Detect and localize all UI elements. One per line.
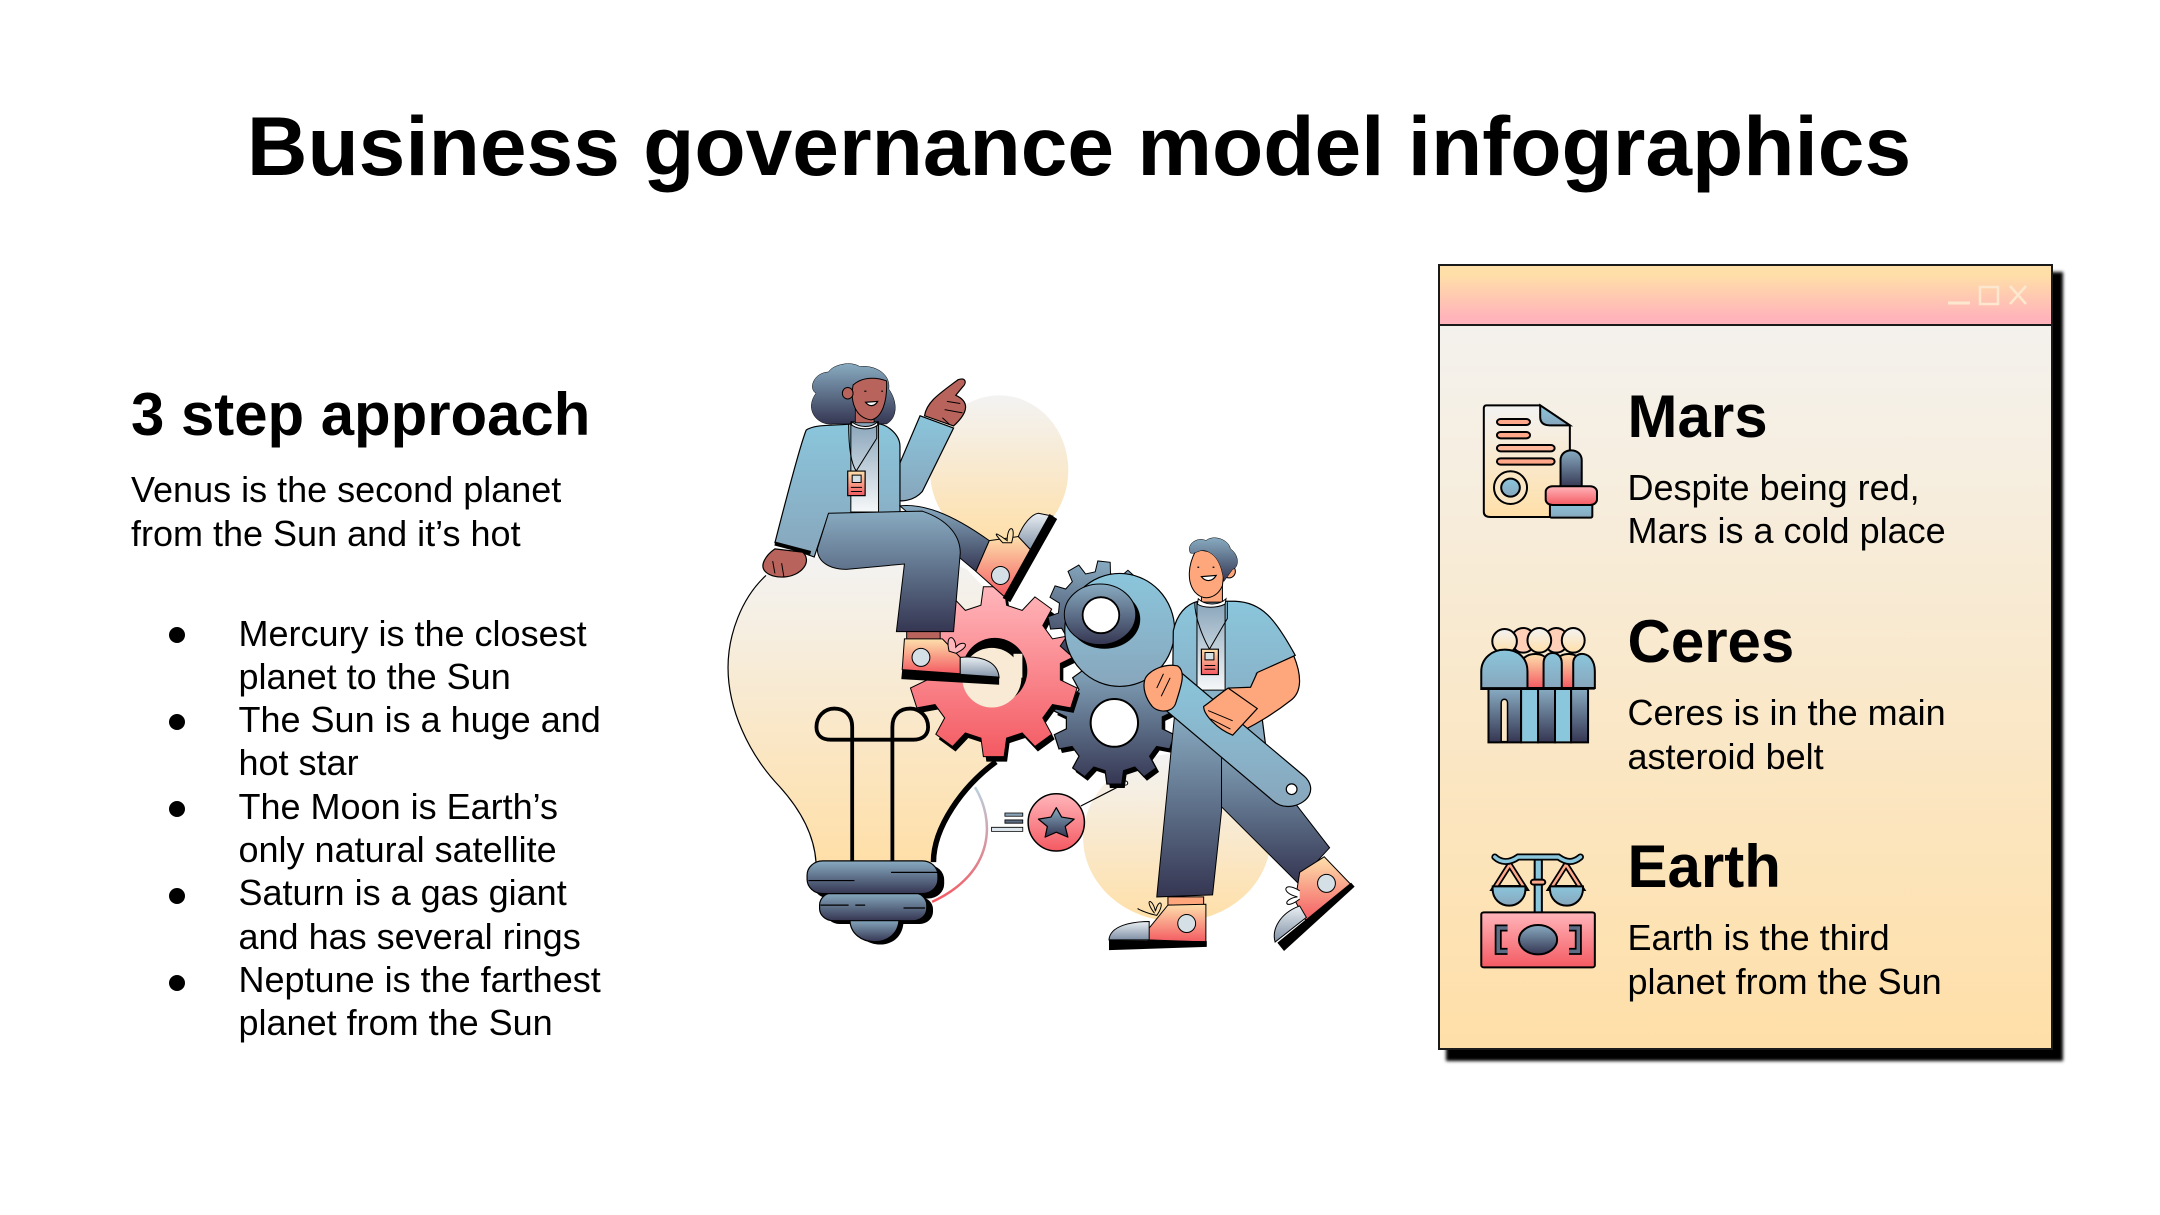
- dark gear upper and wrench head: [1044, 556, 1175, 686]
- Mars text: Despite being red,: [1628, 467, 1920, 508]
- Mars text: [1628, 467, 1946, 551]
- connector: star badge: [992, 781, 1128, 851]
- man trousers: [1157, 715, 1330, 897]
- Ceres text: asteroid belt: [1628, 736, 1824, 777]
- woman lower shoe: [901, 632, 999, 685]
- bullet list: planet from the Sun: [238, 1002, 553, 1043]
- bullet list: Mercury is the closest: [238, 612, 587, 654]
- man hands: [1144, 665, 1257, 735]
- bulb base: [807, 861, 944, 945]
- icon: group of people: [1480, 627, 1596, 744]
- woman hand resting: [763, 549, 806, 577]
- woman trousers: [817, 506, 989, 632]
- dark gear lower: [1054, 662, 1177, 788]
- heading: 3 step approach: 3 step approach: [131, 381, 590, 448]
- man lanyard and badge: [1195, 602, 1227, 675]
- intro text: Venus is the second planet: [131, 469, 561, 510]
- intro text: from the Sun and it’s hot: [131, 513, 521, 554]
- bullet list: hot star: [238, 742, 359, 783]
- Ceres heading: Ceres: [1628, 608, 1794, 675]
- bullet list: planet to the Sun: [238, 656, 511, 697]
- Ceres text: [1628, 692, 1946, 777]
- Ceres text: Ceres is in the main: [1628, 692, 1946, 733]
- bullet list: [169, 612, 601, 1043]
- man left shoe: [1109, 897, 1207, 950]
- Earth text: Earth is the third: [1628, 917, 1890, 958]
- bulb wire: [932, 787, 987, 902]
- man inner shirt: [1197, 602, 1225, 690]
- woman raised arm: [896, 416, 954, 501]
- woman head: [842, 378, 887, 429]
- window controls: [1948, 285, 2027, 306]
- bullet list: Saturn is a gas giant: [238, 872, 567, 913]
- woman: [763, 364, 1057, 685]
- bullet list: The Moon is Earth’s: [238, 786, 558, 827]
- red gear: [910, 587, 1080, 762]
- woman torso and jacket: [775, 422, 900, 557]
- window title bar: [1438, 264, 2053, 326]
- man right shoe: [1274, 857, 1355, 951]
- bullet list: The Sun is a huge and: [238, 699, 601, 740]
- intro text: [131, 469, 561, 554]
- bullet list: and has several rings: [238, 916, 581, 957]
- background blobs: [930, 395, 1271, 921]
- Mars heading: Mars: [1628, 383, 1768, 450]
- woman hair: [811, 364, 895, 424]
- Mars text: Mars is a cold place: [1628, 510, 1946, 551]
- Earth text: [1628, 917, 1942, 1002]
- icon: document with stamp: [1482, 404, 1598, 519]
- bullet list: only natural satellite: [238, 829, 557, 870]
- bullet list: Neptune is the farthest: [238, 959, 601, 1000]
- man arm: [1204, 656, 1300, 735]
- woman raised shoe: [976, 513, 1057, 602]
- panel shadow: [1446, 272, 2063, 1061]
- Earth heading: Earth: [1628, 833, 1781, 900]
- Earth text: planet from the Sun: [1628, 961, 1942, 1002]
- title: Business governance model infographics: [247, 99, 1911, 193]
- wrench handle: [1159, 671, 1311, 806]
- window panel: [1438, 264, 2066, 1064]
- panel body: [1438, 264, 2053, 1050]
- light bulb: [728, 553, 1021, 945]
- man torso: [1172, 601, 1295, 750]
- woman hand: [925, 379, 966, 426]
- icon: scales of justice: [1480, 854, 1596, 968]
- man head: [1189, 538, 1237, 607]
- man: [1109, 538, 1355, 951]
